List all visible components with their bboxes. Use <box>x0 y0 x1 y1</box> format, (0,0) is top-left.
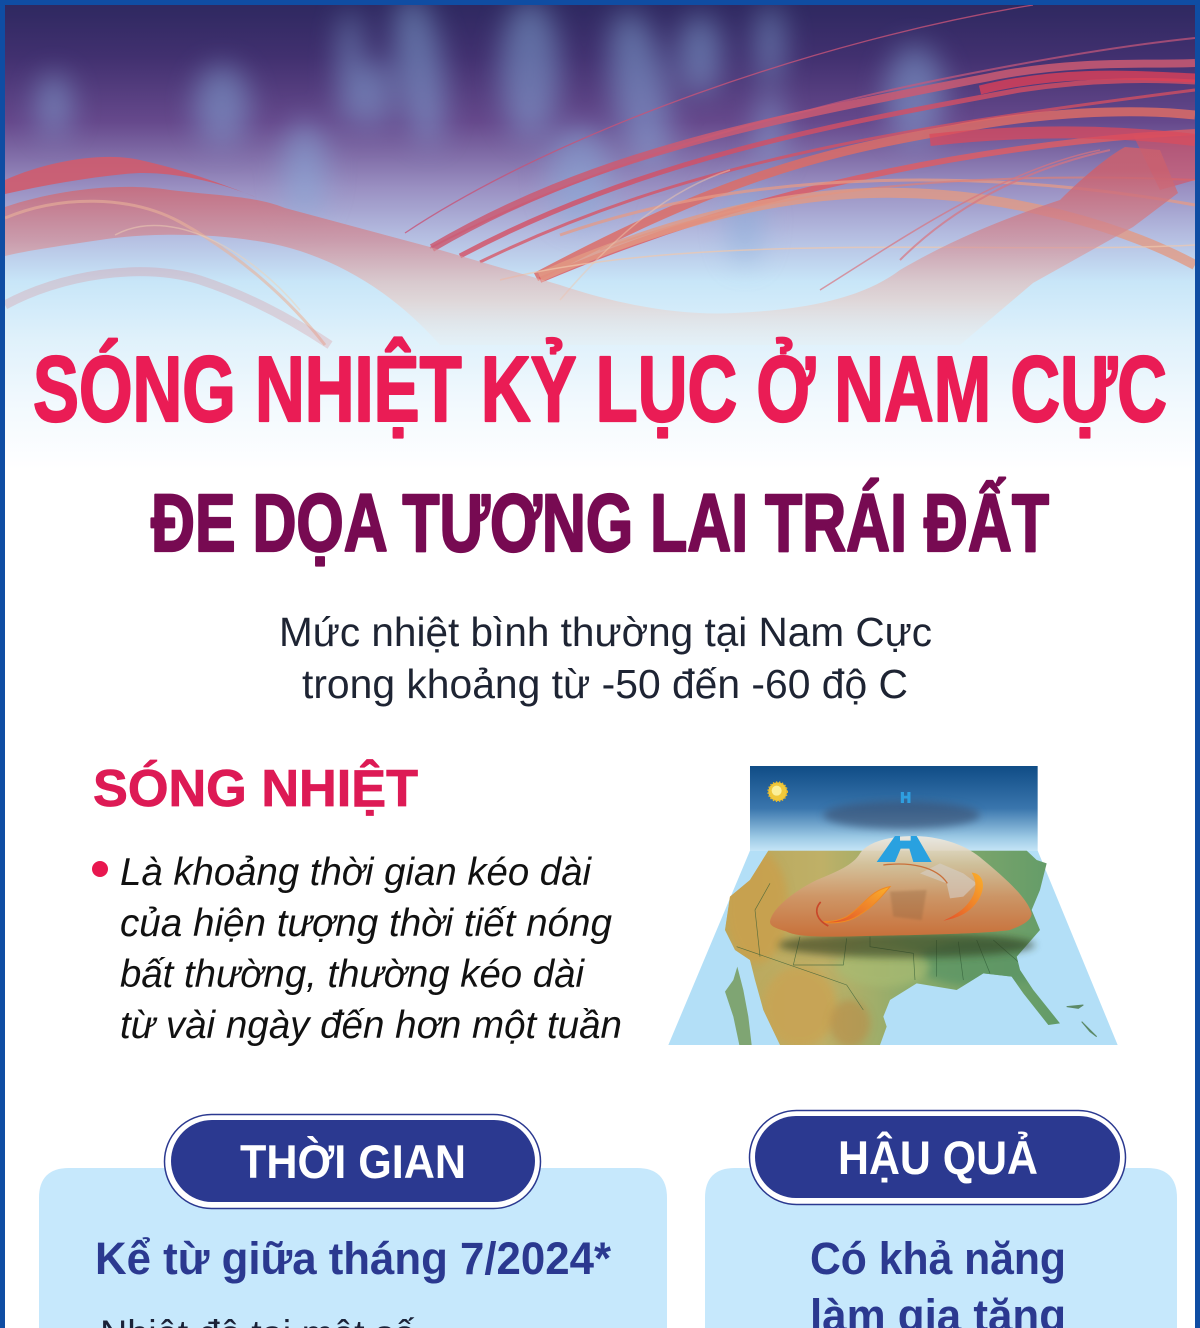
panel heading line 1: Có khả năng <box>810 1233 1066 1284</box>
intro line 2: trong khoảng từ -50 đến -60 độ C <box>302 661 908 707</box>
islands <box>1067 1005 1097 1037</box>
right ribbon fan <box>405 5 1195 300</box>
pill: thời gian <box>171 1120 535 1202</box>
definition line 3: bất thường, thường kéo dài <box>120 953 585 996</box>
sea <box>668 851 1118 1045</box>
heat dome <box>770 836 1032 937</box>
dome inner shade <box>890 890 927 920</box>
panel background <box>705 1168 1177 1328</box>
upper cloud <box>823 801 980 829</box>
dome shadow <box>778 932 1035 958</box>
heat arrow east <box>943 873 983 921</box>
panel: thời gian <box>39 1114 667 1328</box>
baja peninsula <box>725 967 752 1045</box>
land <box>717 850 1067 1047</box>
panel heading: Kể từ giữa tháng 7/2024* <box>95 1233 611 1284</box>
heat arrow west <box>823 887 890 923</box>
pill outline <box>750 1110 1126 1204</box>
panel: hậu quả <box>705 1110 1177 1328</box>
definition line 4: từ vài ngày đến hơn một tuần <box>120 1004 622 1047</box>
pill outline <box>164 1114 540 1208</box>
left ribbons and main band <box>5 157 258 198</box>
thin arrow north <box>883 864 947 883</box>
pill label: THỜI GIAN <box>240 1135 466 1188</box>
title <box>33 337 1167 569</box>
pill: hậu quả <box>755 1116 1120 1198</box>
high pressure arrow H <box>877 836 932 862</box>
aurora wisps <box>36 0 945 265</box>
letter H: H <box>900 791 911 807</box>
state lines <box>737 883 1020 1010</box>
header background: aurora sky with ribbons <box>0 0 1200 470</box>
definition block <box>92 851 622 1047</box>
icon: sun <box>768 782 787 801</box>
intro line 1: Mức nhiệt bình thường tại Nam Cực <box>279 609 932 655</box>
sky panel <box>750 766 1038 851</box>
illustration: heat dome map <box>668 766 1118 1047</box>
definition line 1: Là khoảng thời gian kéo dài <box>120 851 592 894</box>
definition line 2: của hiện tượng thời tiết nóng <box>120 902 612 945</box>
bullet <box>92 861 108 877</box>
section heading: sóng nhiệt: SÓNG NHIỆT <box>93 759 418 818</box>
intro text <box>279 609 932 707</box>
great lakes <box>920 863 977 898</box>
panel background <box>39 1168 667 1328</box>
pill label: HẬU QUẢ <box>838 1131 1038 1184</box>
